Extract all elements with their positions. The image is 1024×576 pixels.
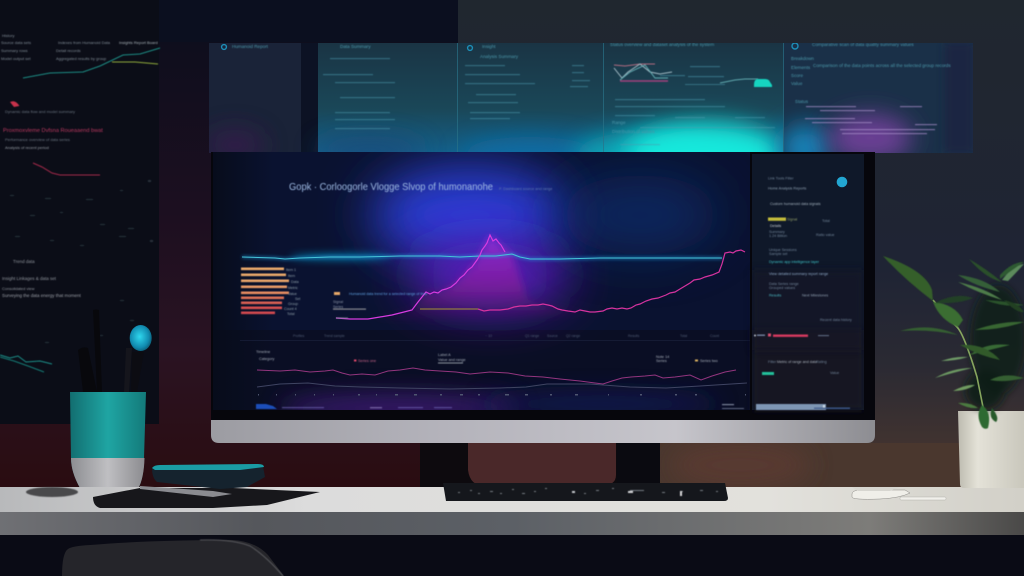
left panel top labels — [1, 33, 158, 61]
chart axis labels: Results — [628, 334, 640, 338]
sidebar text: 1.24 Billion — [769, 234, 787, 238]
lower chart labels: Timeline — [256, 350, 270, 354]
top strip text rows: Status — [795, 99, 809, 104]
sidebar text: Summary — [769, 230, 785, 234]
lower chart labels — [256, 350, 718, 364]
chart legend: Humanoid data trend for a selected range of time — [349, 292, 427, 296]
top strip text rows: Distribution of values — [612, 129, 655, 134]
bar chart labels: Data — [291, 280, 299, 284]
chart axis labels: Count — [710, 334, 719, 338]
speckles — [10, 180, 153, 343]
sidebar text: Results — [769, 294, 781, 298]
plant leaves — [883, 256, 1024, 429]
chart: magenta peak line — [336, 235, 505, 319]
pens — [78, 310, 144, 392]
bar chart labels: Metric — [288, 286, 298, 290]
chart: left teal line — [23, 48, 160, 78]
chair highlight — [200, 540, 283, 576]
sidebar text: Filter — [768, 360, 777, 364]
phone — [140, 486, 232, 497]
desk front edge — [0, 512, 1024, 536]
chart legend: Signal — [333, 300, 343, 304]
top strip text rows: Humanoid Report — [232, 44, 269, 49]
sidebar text: Unique Sessions — [769, 248, 797, 252]
desk top surface — [0, 487, 1024, 513]
panel: floating top dashboard strip — [209, 43, 973, 153]
sidebar text: Details — [770, 224, 781, 228]
sidebar text: Custom humanoid data signals — [770, 202, 821, 206]
chart axis labels: Profiles — [293, 334, 305, 338]
chart axis labels — [293, 334, 719, 338]
chart legend — [333, 292, 427, 318]
chart axis labels: Source — [547, 334, 558, 338]
lower footer strip — [256, 404, 744, 409]
bar chart labels: Value — [288, 292, 297, 296]
tablet — [93, 488, 320, 508]
chart axis labels: ·· 10 — [485, 334, 492, 338]
sidebar text — [768, 176, 852, 375]
chart legend: Series — [333, 305, 343, 309]
chart: horizontal bars — [241, 268, 289, 314]
bar chart labels: Group — [288, 302, 298, 306]
left panel captions: Performance overview of data series — [5, 137, 70, 142]
panel: left wall dashboard — [0, 0, 160, 424]
chart: left red line — [33, 163, 100, 175]
chair back — [62, 540, 284, 576]
sidebar bottom bar — [756, 404, 850, 410]
monitor — [211, 152, 875, 488]
bar chart labels: Item — [288, 274, 295, 278]
top strip text rows: Range — [612, 120, 626, 125]
lower axis ticks — [258, 394, 746, 396]
top strip text rows: Elements — [791, 65, 811, 70]
plant dark foliage mass — [965, 285, 1024, 410]
sidebar text: Metric of range and data — [777, 360, 818, 364]
bar chart labels: Total — [287, 312, 295, 316]
icons: round top strip markers — [222, 43, 798, 50]
keyboard key highlights — [458, 488, 718, 496]
sidebar text: View detailed summary report range — [769, 272, 828, 276]
icon: teal shape — [754, 79, 772, 87]
chart axis labels: Total — [680, 334, 687, 338]
top strip mini chart — [614, 64, 758, 83]
top strip text rows: Insight — [482, 44, 496, 49]
top strip text rows — [232, 42, 951, 134]
panel: right sidebar — [750, 152, 875, 420]
sidebar text: Link Tools Filter — [768, 176, 794, 180]
under desk — [0, 535, 1024, 576]
panel dividers — [457, 43, 784, 153]
chart: lower grey line — [257, 383, 747, 389]
chart axis labels: Q1 range — [525, 334, 539, 338]
sidebar text: Signal — [787, 218, 797, 222]
chart axis labels: Q2 range — [566, 334, 580, 338]
chart: main area fill — [402, 233, 564, 318]
desk items: lamp base, box and tablet — [26, 464, 320, 508]
bar chart labels: Set — [295, 297, 300, 301]
left panel captions — [2, 109, 82, 298]
sidebar text: Rating — [816, 360, 827, 364]
top strip text rows: Value — [791, 81, 803, 86]
monitor bezel — [211, 152, 875, 421]
left panel captions: Surveying the data energy that moment — [2, 293, 82, 298]
lower chart labels: Series — [656, 359, 667, 363]
chart: lower pink line — [257, 368, 736, 384]
left panel top labels: Detail records — [56, 48, 81, 53]
icon: glowing blue ball — [130, 325, 152, 351]
sidebar text: Value — [830, 371, 839, 375]
monitor chin — [211, 420, 875, 443]
top strip text rows: Score — [791, 73, 803, 78]
top strip text rows: Analysis Summary — [480, 54, 519, 59]
chart: magenta long line — [420, 250, 745, 312]
plant stem — [933, 300, 984, 412]
sidebar text: Data Series range — [769, 282, 799, 286]
left panel top labels: Indexes from Humanoid Data — [58, 40, 111, 45]
chart axis labels: Trend sample — [324, 334, 345, 338]
chart subtitle: P. Dashboard source and range — [499, 187, 552, 191]
plant pot — [958, 411, 1024, 488]
panel: main screen — [213, 152, 750, 422]
lower chart labels: Note 14 — [656, 355, 669, 359]
top strip text rows: Status overview and dataset analysis of the system — [610, 42, 714, 47]
bar chart labels — [284, 268, 300, 316]
cup — [70, 392, 146, 497]
icon: blue status ball — [837, 177, 847, 187]
chart: left lower teal line — [0, 355, 52, 372]
left panel top labels: Insights Report Board — [119, 40, 158, 45]
lower chart labels: Value and range — [438, 358, 466, 362]
left panel captions: Analysis of recent period — [5, 145, 49, 150]
top strip text rows: Comparative scan of data quality summary values — [812, 42, 914, 47]
sidebar text: Home Analysis Reports — [768, 186, 806, 190]
left panel captions: Dynamic data flow and model summary — [5, 109, 75, 114]
sidebar green row — [762, 372, 774, 375]
top strip text rows: Breakdown — [791, 56, 814, 61]
sidebar red row — [754, 334, 829, 337]
icon: red marker — [10, 101, 19, 107]
desk — [0, 487, 1024, 576]
left panel top labels: Summary rows — [1, 48, 28, 53]
left panel heading: Proxmoxvleme Dvfsna Roueaaend bwat — [3, 128, 103, 134]
chart: blue trend line — [242, 254, 722, 259]
left panel captions: Consolidated view — [2, 286, 35, 291]
sidebar text: Next Milestones — [802, 294, 828, 298]
teal box — [152, 466, 265, 489]
sidebar text: Recent data history — [820, 318, 852, 322]
sidebar text: Ratio value — [816, 233, 834, 237]
sidebar text: Total — [822, 219, 830, 223]
left panel top labels: Aggregated results by group — [56, 56, 107, 61]
desk items: paper stack — [852, 487, 946, 500]
lower chart labels: Series one — [358, 359, 376, 363]
top strip text rows: Data Summary — [340, 44, 371, 49]
sidebar text: Sample set — [769, 252, 787, 256]
top strip text rows: Comparison of the data points across all the selected group records — [813, 63, 951, 68]
lower chart labels: Category — [259, 357, 275, 361]
left panel top labels: Model output set — [1, 56, 31, 61]
lower chart labels: Series two — [700, 359, 718, 363]
bar chart labels: Item 1 — [286, 268, 296, 272]
plant — [883, 256, 1024, 488]
pen holder — [70, 310, 152, 497]
chart title: Gopk · Corloogorle Vlogge Slvop of humonanohe — [289, 182, 493, 193]
left panel top labels: Source data sets — [1, 40, 31, 45]
lower chart labels: Label A — [438, 353, 451, 357]
monitor stand — [617, 443, 660, 488]
left panel captions: Insight Linkages & data set — [2, 276, 57, 281]
left panel top labels: History — [2, 33, 14, 38]
sidebar text: Grouped values — [769, 286, 795, 290]
left panel captions: Trend data — [13, 259, 35, 264]
sidebar text: Dynamic app intelligence layer — [769, 260, 820, 264]
bar chart labels: Count 4 — [284, 307, 297, 311]
keyboard — [443, 483, 728, 501]
